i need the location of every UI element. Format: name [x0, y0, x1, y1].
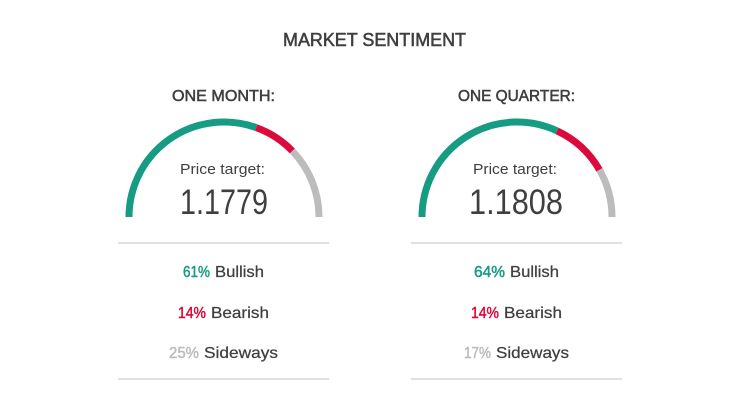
stat: bearish: Bearish	[504, 305, 562, 322]
panel: one quarter	[411, 88, 622, 379]
price target value: 1.1808	[469, 183, 563, 222]
stat: bullish: Bullish	[510, 264, 559, 281]
title: MARKET SENTIMENT	[283, 30, 466, 50]
price target value: 1.1779	[180, 183, 268, 222]
stat: bearish: 14%	[178, 305, 206, 322]
stat: sideways: Sideways	[204, 345, 278, 362]
stat: bearish: Bearish	[211, 305, 269, 322]
stat: sideways: 25%	[169, 345, 199, 362]
stat: sideways: 17%	[464, 345, 491, 362]
panel: one month	[118, 88, 329, 379]
stat: bullish	[474, 264, 559, 281]
stat: bullish: Bullish	[215, 264, 264, 281]
gauge: one month	[129, 122, 319, 217]
stat: bullish	[183, 264, 264, 281]
heading: one quarter: ONE QUARTER:	[458, 88, 575, 105]
heading: one month: ONE MONTH:	[172, 88, 275, 105]
stat: bearish	[471, 305, 562, 322]
stat: sideways	[464, 345, 569, 362]
stat: bullish: 61%	[183, 264, 210, 281]
gauge: one quarter	[422, 122, 612, 217]
stat: sideways: Sideways	[496, 345, 569, 362]
stat: bearish	[178, 305, 269, 322]
stat: bullish: 64%	[474, 264, 505, 281]
price target label: Price target:	[180, 161, 265, 178]
stat: bearish: 14%	[471, 305, 499, 322]
price target label: Price target:	[473, 161, 557, 178]
stat: sideways	[169, 345, 278, 362]
